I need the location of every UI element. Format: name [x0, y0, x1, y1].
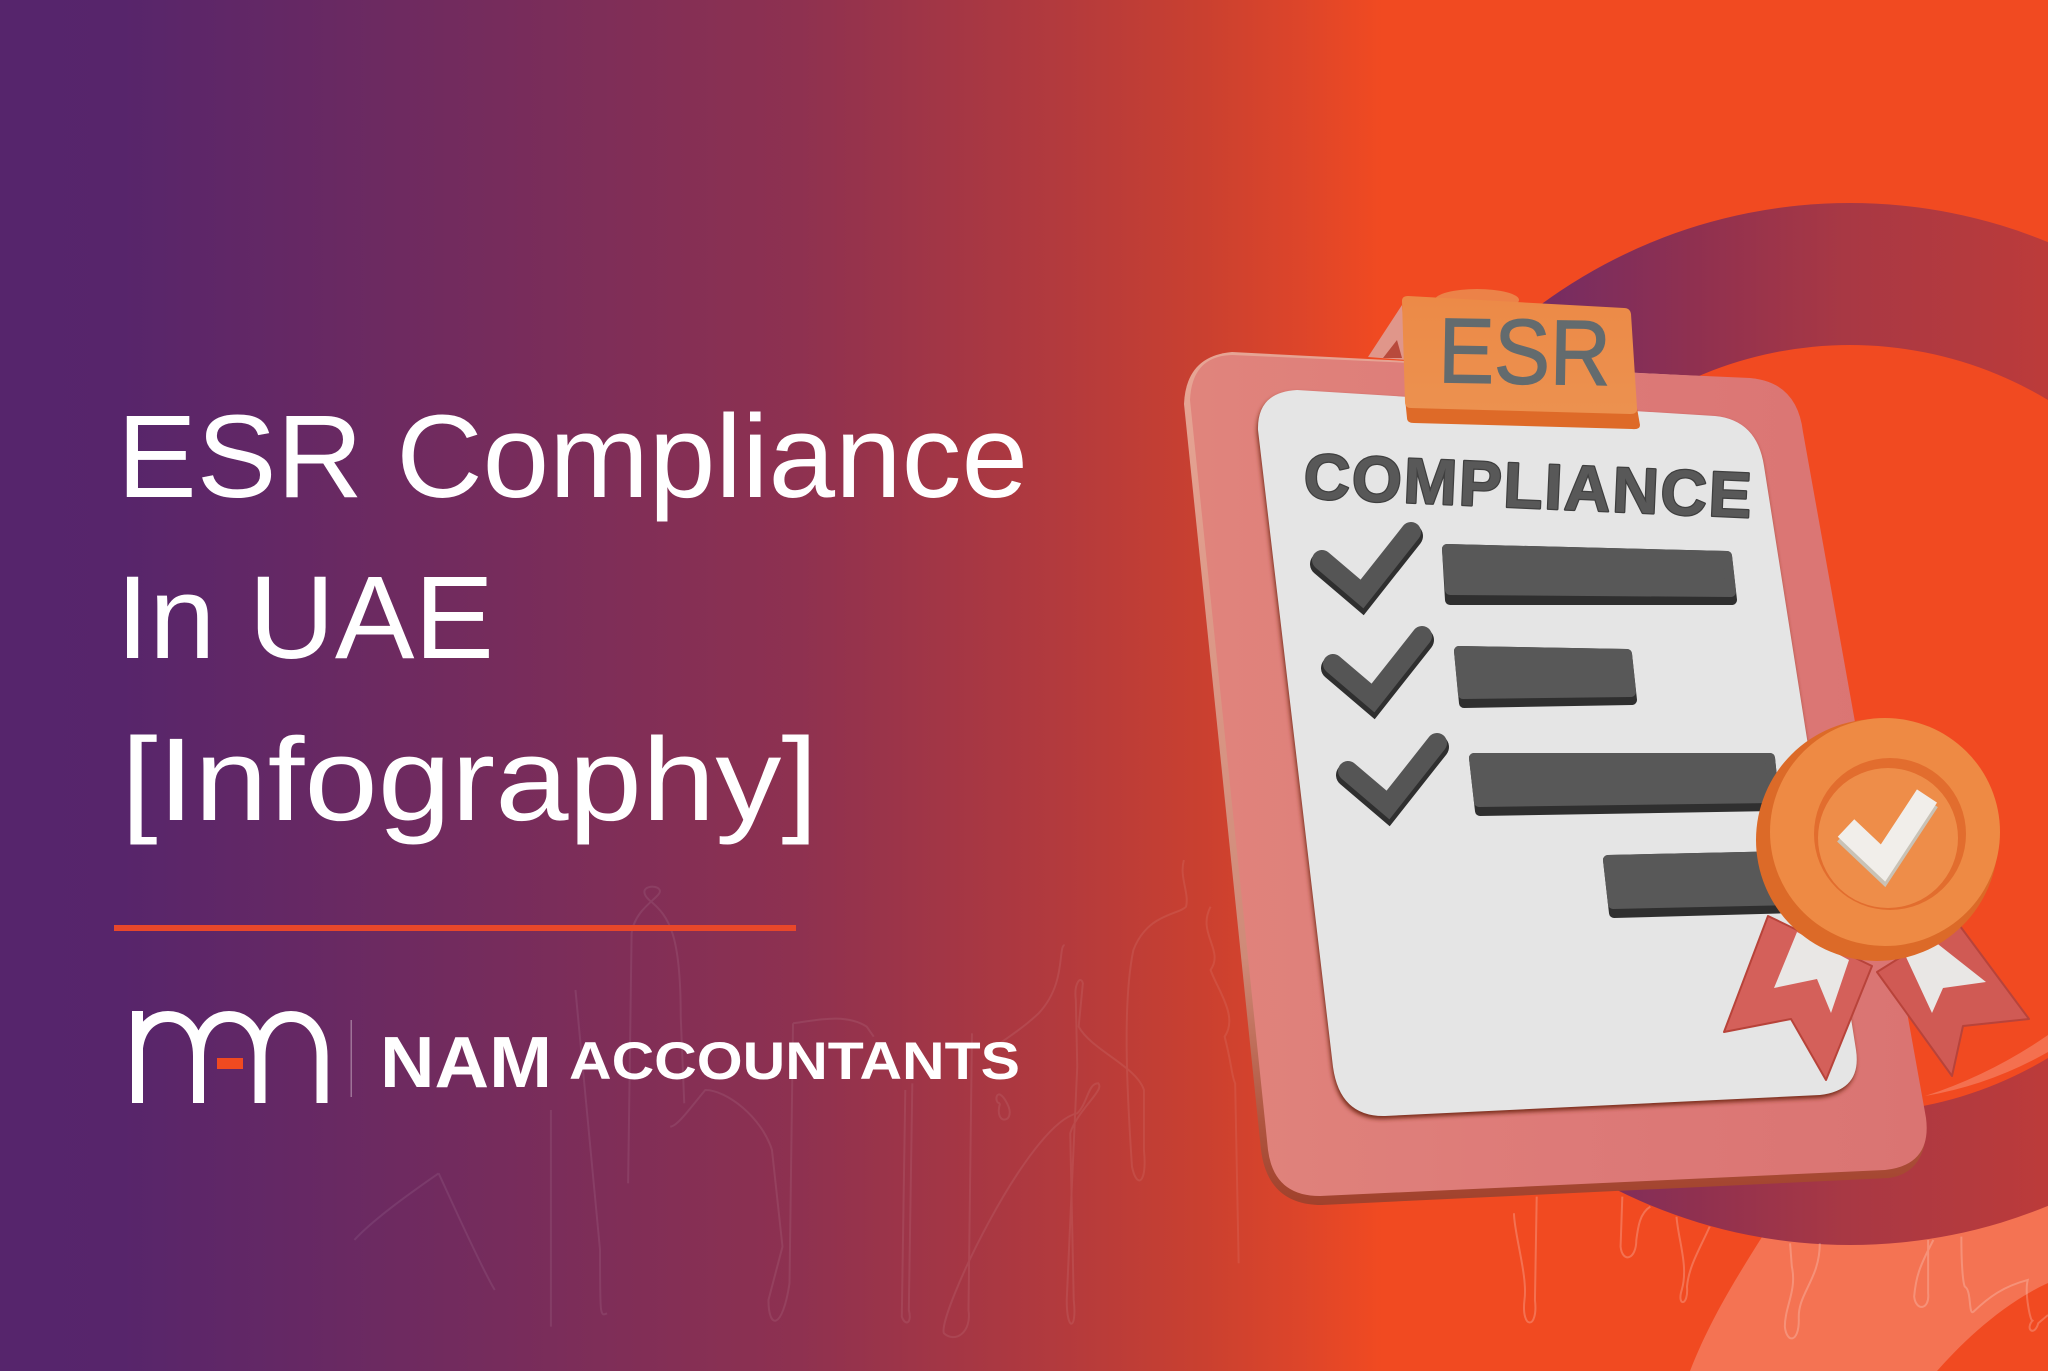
white check on medal — [1846, 796, 1927, 867]
logo wordmark — [380, 1023, 1020, 1103]
decorative coral swoosh — [1690, 1180, 2048, 1371]
clipboard board — [1190, 355, 1927, 1196]
medal face — [1770, 718, 2000, 946]
logo: NAM Accountants — [138, 1011, 1020, 1103]
title — [116, 391, 1028, 846]
medal inner ring — [1814, 758, 1966, 910]
left ribbon — [1724, 916, 1872, 1080]
icon: m-m logo mark — [138, 1011, 322, 1103]
clipboard illustration — [1184, 289, 1927, 1205]
clip with ESR label — [1402, 296, 1640, 429]
clip with ESR label: ESR — [1438, 300, 1611, 405]
decorative purple ring — [1329, 203, 2048, 1245]
logo wordmark: ACCOUNTANTS — [569, 1032, 1020, 1091]
check row 4 bar — [1608, 856, 1795, 913]
paper sheet — [1258, 390, 1857, 1116]
check row 3 — [1348, 743, 1775, 811]
check row 2 — [1333, 636, 1632, 703]
badge with ribbons — [1724, 718, 2029, 1080]
faint skyline line art, left — [354, 860, 1239, 1337]
check row 1 — [1322, 532, 1732, 600]
medal body — [1756, 719, 1998, 961]
clip hinge behind — [1368, 289, 1519, 360]
title: ESR Compliance — [117, 391, 1028, 523]
paper shadow — [1257, 393, 1856, 1119]
checklist heading: COMPLIANCE — [1302, 440, 1753, 532]
logo wordmark: NAM — [380, 1023, 552, 1103]
board edge — [1184, 352, 1926, 1205]
right ribbon — [1877, 922, 2029, 1076]
title: In UAE — [116, 552, 494, 684]
divider line — [114, 925, 796, 931]
faint skyline line art, right — [1514, 1197, 2048, 1338]
title: [Infography] — [121, 714, 818, 846]
